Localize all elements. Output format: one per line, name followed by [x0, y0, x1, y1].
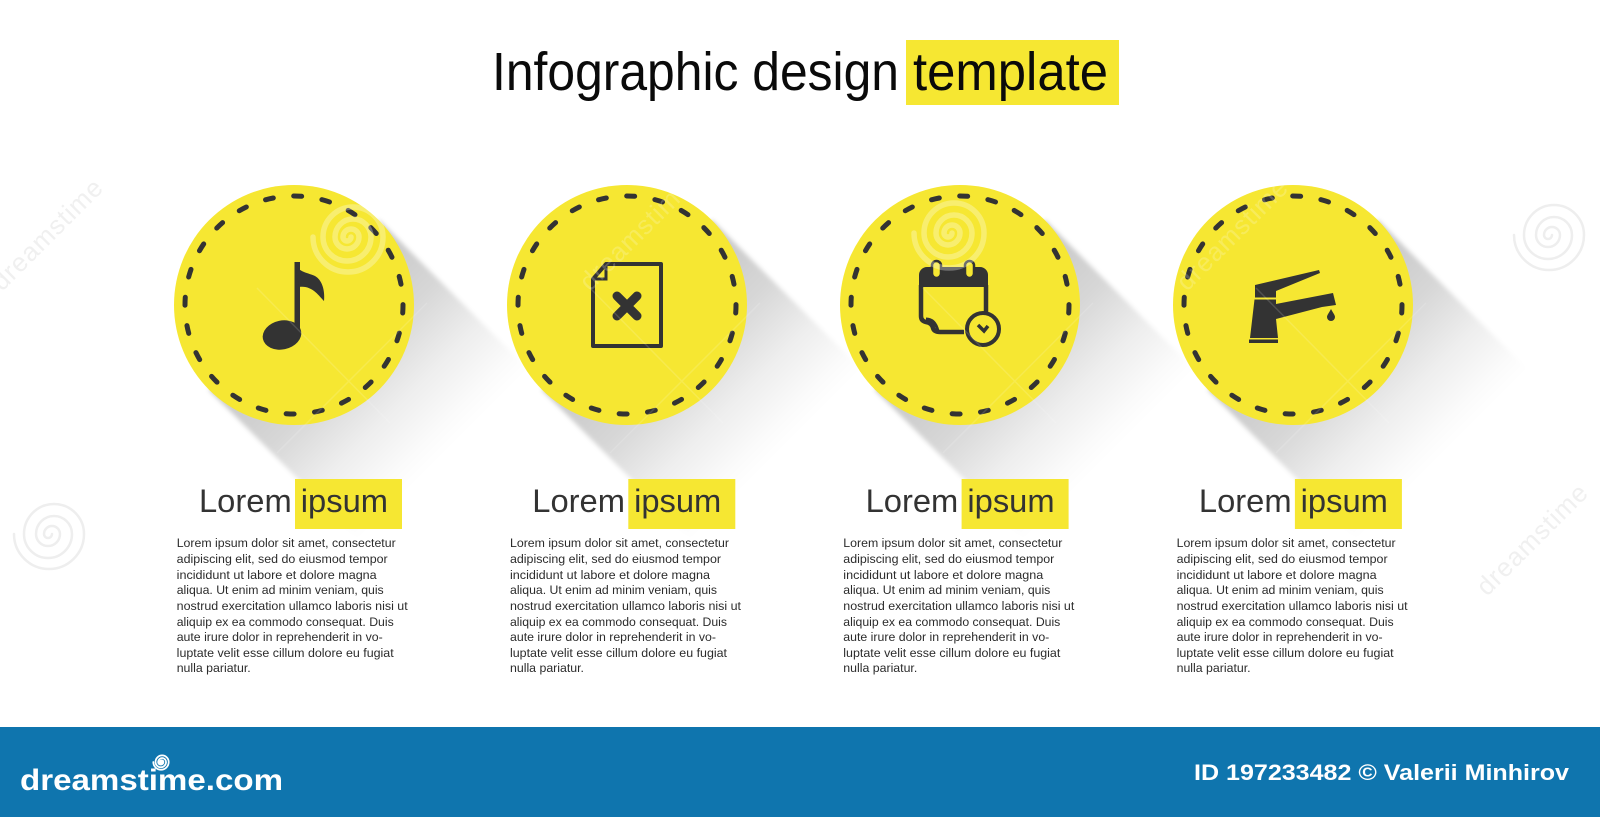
text block: nostrud exercitation ullamco laboris nisi ut: [1177, 599, 1408, 613]
text block: aliquip ex ea commodo consequat. Duis: [843, 615, 1060, 629]
title: [492, 40, 1119, 105]
icon: file with cross: [593, 264, 661, 346]
text block: incididunt ut labore et dolore magna: [510, 568, 710, 582]
text block: [510, 536, 742, 675]
text block: luptate velit esse cillum dolore eu fugiat: [510, 646, 728, 660]
text block: nulla pariatur.: [177, 661, 251, 675]
panel: music note: [174, 185, 414, 675]
text block: adipiscing elit, sed do eiusmod tempor: [510, 552, 721, 566]
footer logo: dreamstime.com: [20, 764, 283, 797]
text block: aute irure dolor in reprehenderit in vo-: [1177, 630, 1383, 644]
text block: [1177, 536, 1408, 675]
text block: [177, 536, 408, 675]
text block: nulla pariatur.: [510, 661, 584, 675]
text block: adipiscing elit, sed do eiusmod tempor: [1177, 552, 1388, 566]
text block: aliquip ex ea commodo consequat. Duis: [510, 615, 727, 629]
yellow dashed circle: [1173, 185, 1413, 425]
image id and credit: ID 197233482 © Valerii Minhirov: [1194, 760, 1570, 785]
text block: Lorem ipsum dolor sit amet, consectetur: [1177, 536, 1396, 550]
panel: calendar with clock: [840, 185, 1080, 675]
heading: Lorem ipsum: [532, 483, 721, 519]
text block: aliqua. Ut enim ad minim veniam, quis: [843, 583, 1050, 597]
heading: Lorem ipsum: [1199, 483, 1388, 519]
heading: [532, 479, 735, 529]
watermark overlay: dreamstime: [1470, 477, 1594, 601]
panel: dripping faucet: [1173, 185, 1413, 675]
text block: incididunt ut labore et dolore magna: [1177, 568, 1377, 582]
text block: [843, 536, 1075, 675]
icon: music note: [260, 262, 324, 353]
title: template: [913, 42, 1108, 102]
yellow dashed circle: [507, 185, 747, 425]
text block: adipiscing elit, sed do eiusmod tempor: [177, 552, 388, 566]
yellow dashed circle: [840, 185, 1080, 425]
text block: aute irure dolor in reprehenderit in vo-: [177, 630, 383, 644]
title: Infographic design: [492, 42, 899, 102]
heading: [1199, 479, 1402, 529]
text block: aute irure dolor in reprehenderit in vo-: [843, 630, 1049, 644]
text block: incididunt ut labore et dolore magna: [843, 568, 1043, 582]
text block: luptate velit esse cillum dolore eu fugiat: [1177, 646, 1394, 660]
heading: Lorem ipsum: [866, 483, 1055, 519]
text block: aliqua. Ut enim ad minim veniam, quis: [510, 583, 717, 597]
heading: Lorem ipsum: [199, 483, 388, 519]
icon: calendar with clock: [919, 261, 999, 345]
text block: aliqua. Ut enim ad minim veniam, quis: [177, 583, 384, 597]
text block: nostrud exercitation ullamco laboris nisi ut: [177, 599, 408, 613]
text block: aliquip ex ea commodo consequat. Duis: [177, 615, 394, 629]
panel: file with cross: [507, 185, 747, 675]
watermark overlay: dreamstime: [573, 172, 697, 296]
footer banner: [0, 727, 1600, 817]
text block: nostrud exercitation ullamco laboris nisi ut: [843, 599, 1075, 613]
text block: aliqua. Ut enim ad minim veniam, quis: [1177, 583, 1384, 597]
text block: nulla pariatur.: [1177, 661, 1251, 675]
heading: [866, 479, 1069, 529]
text block: adipiscing elit, sed do eiusmod tempor: [843, 552, 1054, 566]
text block: incididunt ut labore et dolore magna: [177, 568, 377, 582]
text block: aute irure dolor in reprehenderit in vo-: [510, 630, 716, 644]
long shadow: circles: [209, 220, 1578, 590]
text block: luptate velit esse cillum dolore eu fugiat: [843, 646, 1061, 660]
text block: luptate velit esse cillum dolore eu fugiat: [177, 646, 394, 660]
text block: Lorem ipsum dolor sit amet, consectetur: [510, 536, 729, 550]
watermark overlay: [0, 172, 1594, 601]
yellow dashed circle: [174, 185, 414, 425]
watermark overlay: dreamstime: [1170, 172, 1294, 296]
text block: aliquip ex ea commodo consequat. Duis: [1177, 615, 1394, 629]
text block: Lorem ipsum dolor sit amet, consectetur: [177, 536, 396, 550]
icon: dripping faucet: [1249, 270, 1336, 343]
text block: nostrud exercitation ullamco laboris nisi ut: [510, 599, 742, 613]
text block: nulla pariatur.: [843, 661, 917, 675]
heading: [199, 479, 402, 529]
text block: Lorem ipsum dolor sit amet, consectetur: [843, 536, 1062, 550]
